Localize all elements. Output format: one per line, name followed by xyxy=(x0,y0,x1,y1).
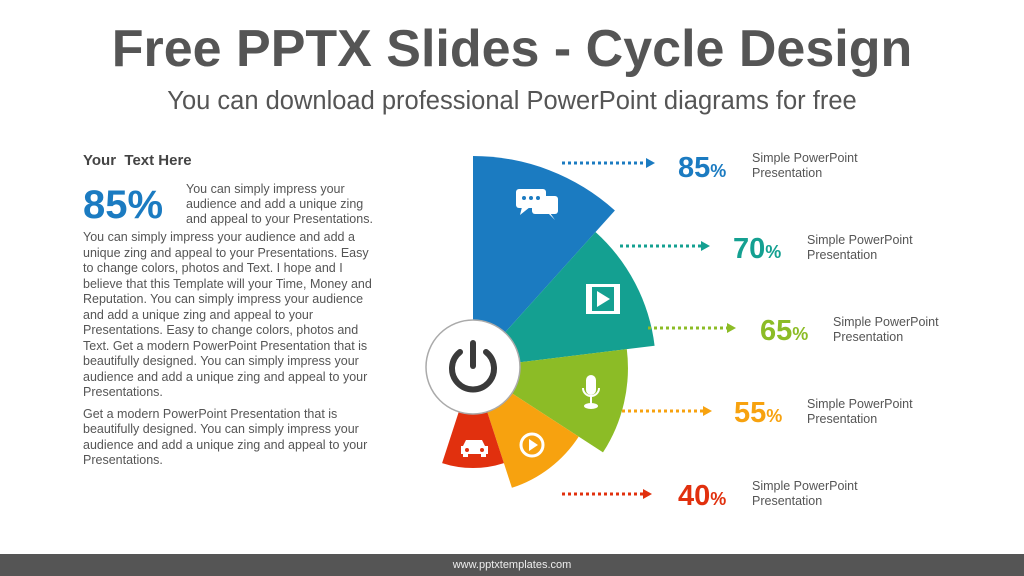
arrow: blue xyxy=(562,158,655,168)
footer: www.pptxtemplates.com xyxy=(453,559,571,571)
value: 85%: 85% xyxy=(678,152,726,184)
sector: green xyxy=(473,349,628,452)
label 1: Simple PowerPoint xyxy=(752,151,858,165)
footer xyxy=(0,554,1024,576)
sector: orange xyxy=(473,368,579,488)
arrow: red xyxy=(562,489,652,499)
label 4 xyxy=(807,397,913,426)
body text: You can simply impress your audience and add a unique zing and appeal to your Presentations. Easy to change colors, photos and Text. I hope and I believe that this Template will your Time, Money and Reputation. You can simply impress your audience and add a unique zing and appeal to your Presentations. Easy to change colors, photos and Text. Get a modern PowerPoint Presentation that is beautifully designed. You can simply impress your audience and add a unique zing and appeal to your Presentations. xyxy=(83,230,372,399)
icon: microphone xyxy=(583,375,599,409)
label 1 xyxy=(752,151,858,180)
big percentage: 85% xyxy=(83,183,163,227)
icon: video xyxy=(586,284,620,314)
icon: car xyxy=(461,440,488,457)
label 3: Simple PowerPoint xyxy=(833,315,939,329)
label 1: Presentation xyxy=(752,166,822,180)
label 5: Presentation xyxy=(752,494,822,508)
icon: play xyxy=(521,434,543,456)
arrow: green xyxy=(648,323,736,333)
value: 40%: 40% xyxy=(678,480,726,512)
subtitle: You can download professional PowerPoint diagrams for free xyxy=(167,87,857,115)
sector: teal xyxy=(473,232,655,368)
value: 65%: 65% xyxy=(760,315,808,347)
label 2: Presentation xyxy=(807,248,877,262)
intro text: You can simply impress your audience and add a unique zing and appeal to your Presentations. xyxy=(186,182,373,226)
title: Free PPTX Slides - Cycle Design xyxy=(112,20,912,78)
label 2: Simple PowerPoint xyxy=(807,233,913,247)
sector: blue xyxy=(473,156,615,368)
label 3 xyxy=(833,315,939,344)
left text panel xyxy=(83,152,373,467)
label 5: Simple PowerPoint xyxy=(752,479,858,493)
label 2 xyxy=(807,233,913,262)
center power button xyxy=(426,320,520,414)
label 5 xyxy=(752,479,858,508)
sector: red xyxy=(442,368,504,468)
label 4: Simple PowerPoint xyxy=(807,397,913,411)
label 4: Presentation xyxy=(807,412,877,426)
heading: Your Text Here xyxy=(83,152,192,169)
value: 55%: 55% xyxy=(734,397,782,429)
arrow: orange xyxy=(622,406,712,416)
value: 70%: 70% xyxy=(733,233,781,265)
icon: chat xyxy=(516,189,558,220)
body text: Get a modern PowerPoint Presentation that is beautifully designed. You can simply impress your audience and add a unique zing and appeal to your Presentations. xyxy=(83,406,367,467)
label 3: Presentation xyxy=(833,330,903,344)
arrow: teal xyxy=(620,241,710,251)
